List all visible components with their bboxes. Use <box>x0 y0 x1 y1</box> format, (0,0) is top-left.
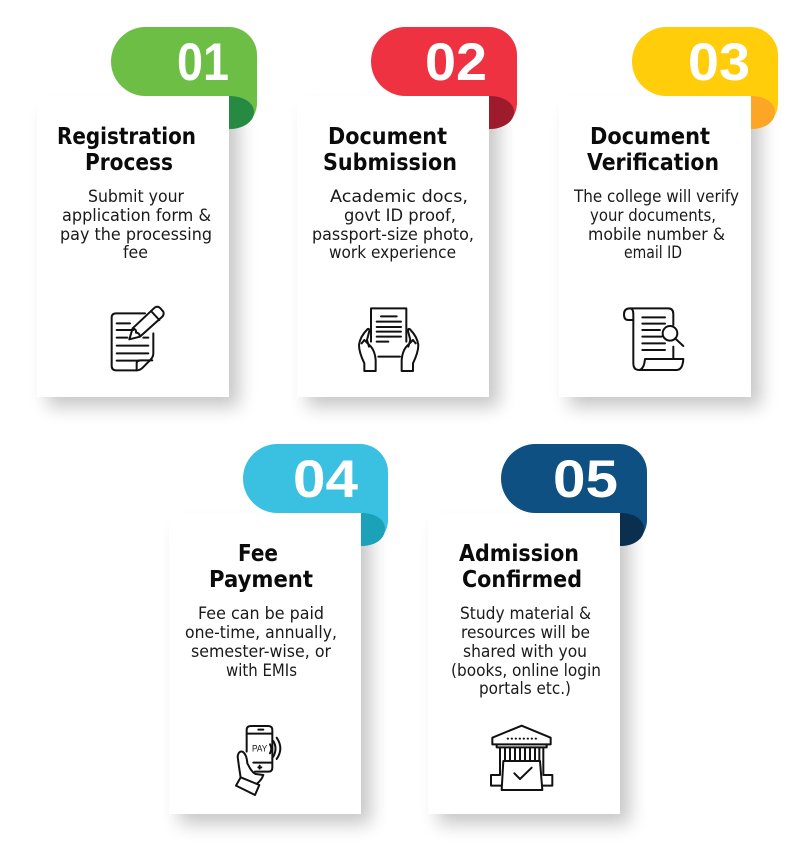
description <box>451 604 601 698</box>
number: 03 <box>688 33 750 92</box>
icon: college building with check <box>491 726 552 790</box>
description: work experience <box>329 243 456 262</box>
heading: Confirmed <box>462 567 582 593</box>
card shadow <box>569 110 761 407</box>
number tab <box>371 27 517 129</box>
card <box>559 96 751 397</box>
card shadow <box>47 110 239 407</box>
description: one-time, annually, <box>185 623 337 642</box>
description <box>573 187 739 262</box>
description: The college will verify <box>573 187 739 206</box>
number tab <box>111 27 257 129</box>
heading <box>459 541 582 593</box>
card shadow <box>307 110 499 407</box>
heading: Payment <box>209 567 313 593</box>
tab fold <box>361 513 385 546</box>
description: semester-wise, or <box>191 642 331 661</box>
number: 02 <box>425 33 487 92</box>
description: application form & <box>62 206 211 225</box>
heading: Admission <box>459 541 579 567</box>
description <box>185 604 337 680</box>
description: with EMIs <box>226 661 297 680</box>
heading: Registration <box>57 124 196 150</box>
heading: Verification <box>587 150 719 176</box>
description: Fee can be paid <box>198 604 324 623</box>
number tab <box>501 444 647 546</box>
card <box>169 513 361 814</box>
description <box>60 187 212 262</box>
description: shared with you <box>463 642 587 661</box>
tab fold <box>620 513 644 546</box>
description: (books, online login <box>451 661 601 680</box>
icon: hand holding phone with pay <box>236 726 280 795</box>
icon: scroll and magnifier <box>624 308 683 370</box>
card shadow <box>179 527 371 824</box>
description: Study material & <box>460 604 591 623</box>
heading: Document <box>590 124 710 150</box>
card <box>37 96 229 397</box>
heading <box>57 124 196 176</box>
icon: hand holding phone with pay: PAY <box>252 743 267 753</box>
number: 05 <box>553 450 618 509</box>
description: passport-size photo, <box>312 225 474 244</box>
heading <box>323 124 457 176</box>
description: portals etc.) <box>479 679 571 698</box>
description: pay the processing <box>60 225 212 244</box>
description: Academic docs, <box>330 187 468 206</box>
number tab <box>632 27 778 129</box>
description: mobile number & <box>588 225 725 244</box>
panel: step 2 document submission <box>297 27 517 407</box>
panel: step 3 document verification <box>559 27 778 407</box>
tab fold <box>489 96 514 129</box>
card shadow <box>438 527 630 824</box>
description <box>312 187 474 262</box>
icon: document and pencil <box>112 307 164 370</box>
card <box>297 96 489 397</box>
description: resources will be <box>461 623 590 642</box>
panel: step 5 admission confirmed <box>428 444 647 824</box>
number tab <box>243 444 388 546</box>
panel: step 1 registration process <box>37 27 257 407</box>
number: 01 <box>177 33 229 92</box>
heading: Document <box>328 124 447 150</box>
tab fold <box>229 96 254 129</box>
description: your documents, <box>590 206 716 225</box>
tab fold <box>751 96 775 129</box>
heading: Process <box>85 150 173 176</box>
heading: Submission <box>323 150 457 176</box>
heading: Fee <box>238 541 278 567</box>
description: fee <box>123 243 148 262</box>
number: 04 <box>293 450 359 509</box>
heading <box>209 541 313 593</box>
panel: step 4 fee payment <box>169 444 388 824</box>
description: Submit your <box>88 187 184 206</box>
icon: hands holding document <box>359 308 418 371</box>
heading <box>587 124 719 176</box>
description: govt ID proof, <box>344 206 456 225</box>
card <box>428 513 620 814</box>
description: email ID <box>624 243 682 262</box>
